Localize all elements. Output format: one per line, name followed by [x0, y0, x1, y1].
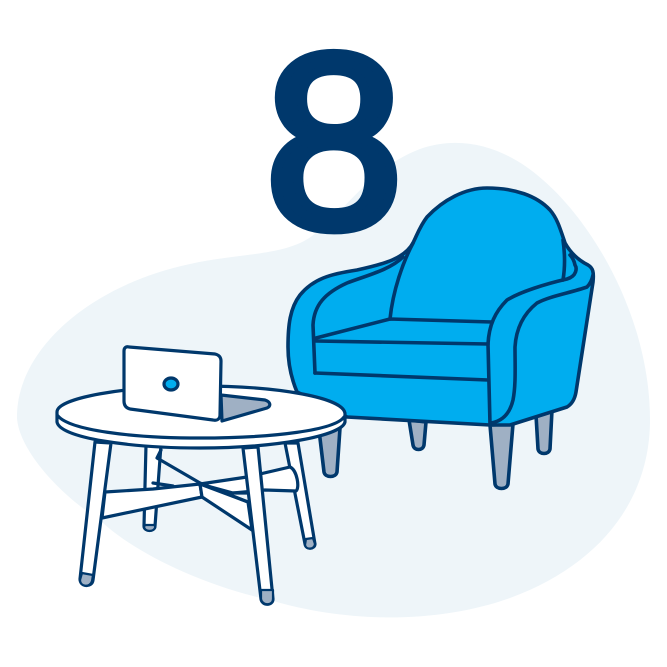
table leg: front left [80, 442, 111, 586]
chair seat cushion and back lines [390, 243, 413, 319]
chair leg: rear right [536, 410, 552, 454]
table top [57, 386, 345, 448]
brace arm: right section [200, 467, 298, 493]
number 8: 8 [265, 2, 403, 280]
table leg: front right [243, 447, 273, 604]
table leg: rear left [144, 445, 161, 530]
table and laptop [57, 347, 345, 604]
brace arm: lower right [200, 484, 252, 530]
brace arm: left section [102, 484, 202, 518]
laptop lid [124, 347, 221, 420]
brace arm: upper diagonal [157, 450, 248, 502]
table cross brace [102, 450, 298, 530]
brace detail [153, 483, 247, 493]
chair right arm [488, 255, 576, 424]
leg tips [80, 525, 315, 604]
chair leg: rear left [409, 420, 426, 450]
chair leg: front right [490, 424, 513, 488]
armchair [288, 188, 593, 488]
chair body [288, 188, 593, 425]
laptop screen reflection [221, 395, 270, 421]
laptop logo [164, 378, 178, 390]
table leg: rear right [285, 443, 315, 548]
background blob [17, 143, 650, 617]
chair leg: front left [319, 428, 340, 476]
